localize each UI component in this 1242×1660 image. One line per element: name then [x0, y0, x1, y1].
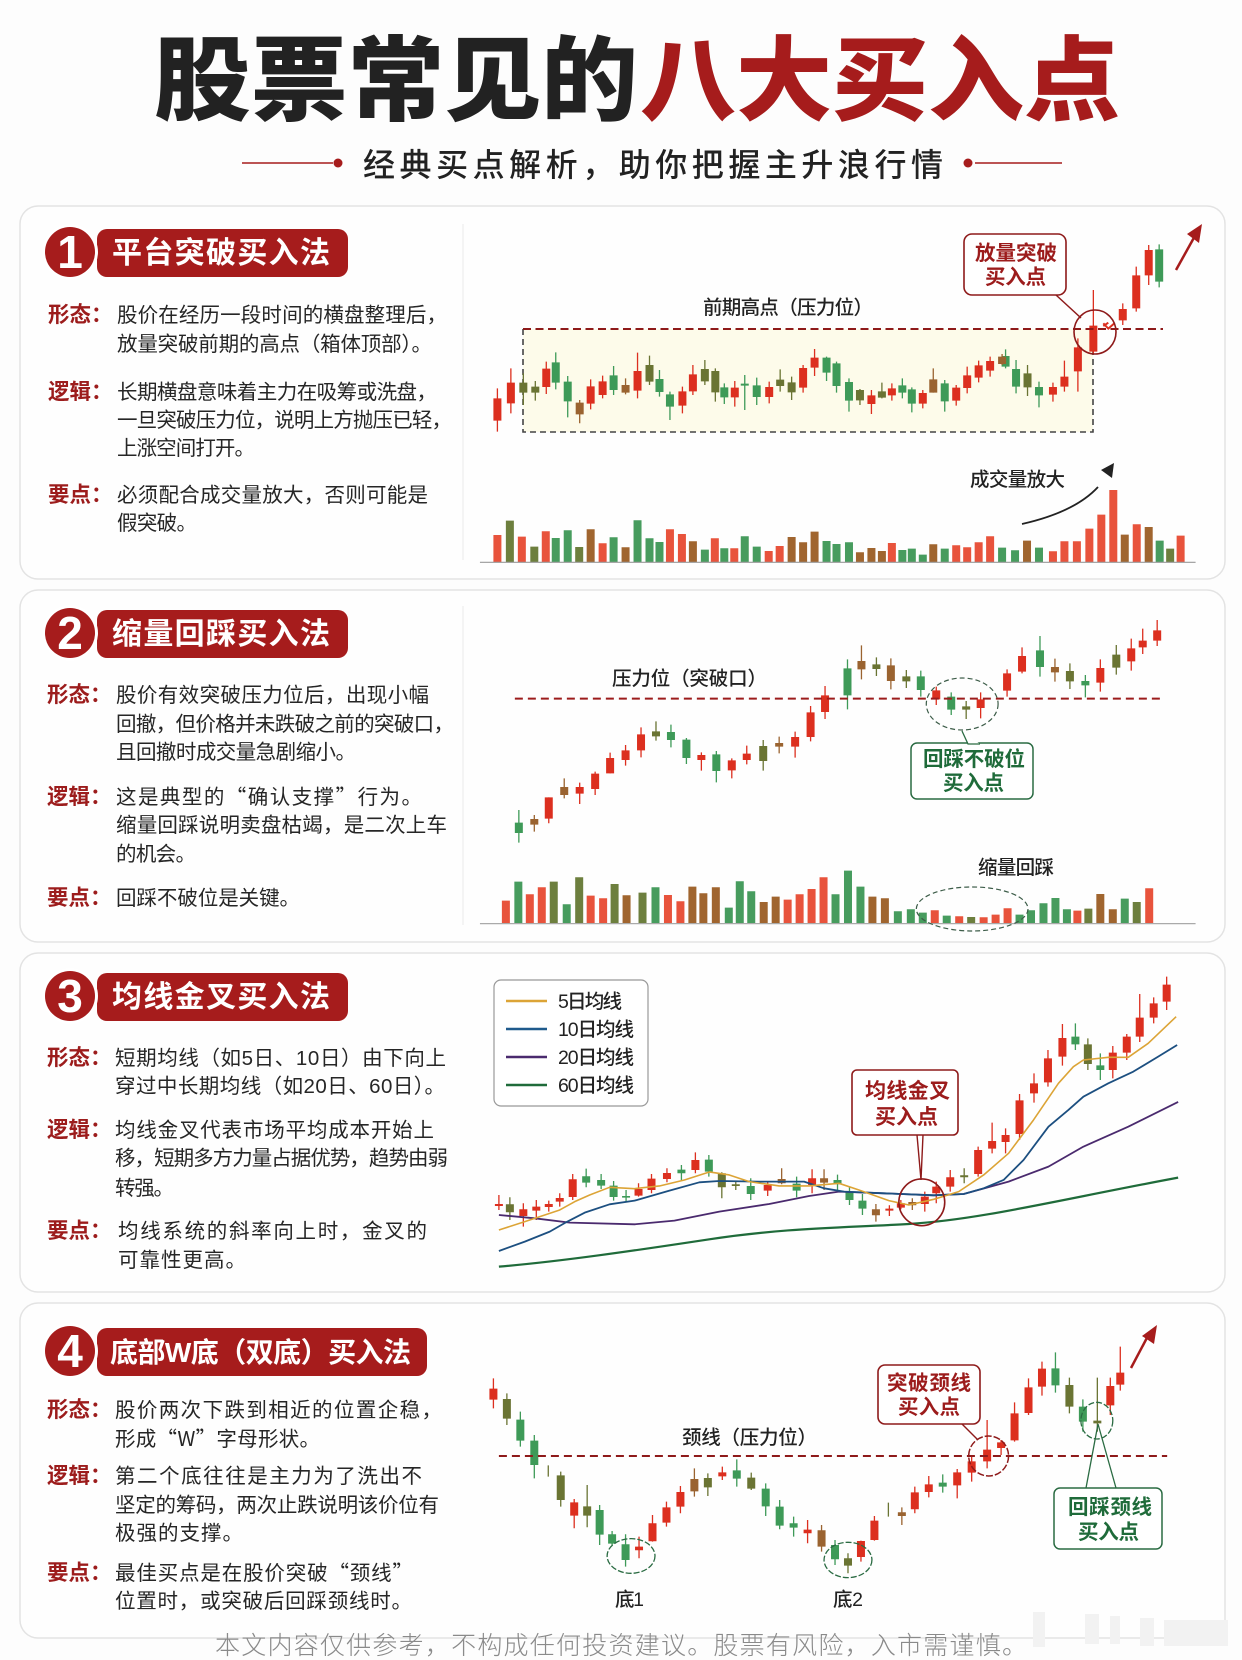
text: method 3 description: 均线金叉代表市场平均成本开始上 — [115, 1119, 434, 1142]
callout: pullback buy point — [911, 731, 1033, 799]
title: 股票常见的 — [154, 31, 638, 133]
text: method 2 description: 缩量回踩说明卖盘枯竭，是二次上车 — [116, 814, 447, 837]
arrow: up trend — [1131, 1325, 1157, 1368]
chart: double bottom candlesticks — [493, 1347, 1167, 1578]
panel: method 2 low-volume pullback — [20, 590, 1225, 942]
text: method 3 description: 转强。 — [115, 1177, 174, 1200]
text: method 2 description: 的机会。 — [116, 843, 196, 866]
legend: moving averages — [494, 980, 648, 1106]
text: method 3 description: 要点： — [47, 1219, 112, 1243]
chart: platform breakout volume — [480, 490, 1196, 562]
text: method 1 description: 逻辑： — [48, 380, 113, 404]
heading: method 2 — [42, 605, 348, 661]
callout: volume breakout buy point — [964, 234, 1081, 318]
heading: method 1 — [42, 224, 348, 280]
label: bottom 2: 底2 — [833, 1589, 863, 1611]
arrow: up trend — [1176, 224, 1202, 270]
heading: method 1: 平台突破买入法 — [112, 236, 330, 270]
callout: volume breakout buy point: 放量突破 — [975, 241, 1057, 265]
text: method 2 description: 且回撤时成交量急剧缩小。 — [116, 741, 356, 764]
text: method 4 description: 形态： — [47, 1397, 112, 1422]
callout: neckline retest buy point: 买入点 — [1078, 1521, 1139, 1544]
text: method 4 description: 形成“W”字母形状。 — [115, 1422, 320, 1452]
text: method 2 description: 形态： — [47, 682, 112, 707]
text: method 2 description: 逻辑： — [47, 785, 112, 809]
text: method 1 description: 一旦突破压力位，说明上方抛压已轻， — [117, 409, 452, 432]
text: method 3 description: 均线系统的斜率向上时，金叉的 — [118, 1220, 427, 1243]
heading: method 4: 底部W底（双底）买入法 — [110, 1337, 411, 1368]
chart: golden cross candlesticks and moving averages — [499, 977, 1178, 1267]
label: resistance: 压力位（突破口） — [612, 668, 767, 690]
label: shrinking volume: 缩量回踩 — [978, 857, 1054, 879]
heading: method 3: 3 — [57, 970, 83, 1022]
callout: neckline retest buy point — [1054, 1424, 1162, 1549]
text: method 1 description: 上涨空间打开。 — [117, 437, 255, 460]
text: method 4 description: 逻辑： — [47, 1464, 112, 1488]
text: method 4 description: 要点： — [47, 1561, 112, 1585]
text: method 4 description: 第二个底往往是主力为了洗出不 — [115, 1465, 422, 1488]
text: method 1 description: 要点： — [48, 483, 113, 507]
callout: neckline breakout buy point: 买入点 — [898, 1396, 960, 1419]
heading: method 4 — [42, 1323, 427, 1379]
panel: method 1 platform breakout — [20, 206, 1225, 579]
callout: pullback buy point: 回踩不破位 — [923, 747, 1025, 771]
arrow: volume curve — [1022, 463, 1114, 524]
heading: method 4: 4 — [57, 1325, 83, 1377]
subtitle: 经典买点解析，助你把握主升浪行情 — [363, 147, 943, 183]
text: method 4 description: 极强的支撑。 — [115, 1522, 243, 1545]
text: method 3 description: 移，短期多方力量占据优势，趋势由弱 — [115, 1147, 448, 1170]
text: method 2 description: 这是典型的“确认支撑”行为。 — [116, 780, 422, 810]
text: method 4 description — [47, 1397, 442, 1613]
text: method 1 description: 必须配合成交量放大，否则可能是 — [117, 484, 428, 507]
panel: method 4 double bottom — [20, 1303, 1225, 1638]
text: method 1 description: 长期横盘意味着主力在吸筹或洗盘， — [117, 381, 437, 404]
heading: method 2: 缩量回踩买入法 — [112, 618, 330, 651]
text: method 3 description: 穿过中长期均线（如20日、60日）。 — [115, 1075, 445, 1098]
text: method 4 description: 坚定的筹码，两次止跌说明该价位有 — [115, 1494, 439, 1517]
heading: method 2: 2 — [57, 607, 83, 659]
text: method 1 description: 放量突破前期的高点（箱体顶部）。 — [117, 333, 432, 356]
legend: moving averages: 10日均线 — [558, 1019, 634, 1041]
text: method 2 description: 股价有效突破压力位后，出现小幅 — [116, 684, 429, 707]
callout: neckline retest buy point: 回踩颈线 — [1068, 1496, 1152, 1519]
footer disclaimer: 本文内容仅供参考，不构成任何投资建议。股票有风险，入市需谨慎。 — [215, 1632, 1027, 1660]
label: volume expansion: 成交量放大 — [970, 469, 1065, 491]
text: method 1 description: 股价在经历一段时间的横盘整理后， — [117, 304, 447, 327]
title: 八大买入点 — [640, 31, 1120, 133]
text: method 3 description: 逻辑： — [47, 1118, 112, 1142]
callout: golden cross buy point: 均线金叉 — [865, 1079, 950, 1103]
text: method 4 description: 位置时，或突破后回踩颈线时。 — [115, 1590, 412, 1613]
heading: method 1: 1 — [57, 226, 83, 278]
text: method 4 description: 最佳买点是在股价突破“颈线” — [115, 1556, 413, 1586]
legend: moving averages: 60日均线 — [558, 1075, 634, 1097]
watermark smudge — [1033, 1612, 1228, 1647]
title — [154, 31, 1120, 133]
text: method 2 description — [47, 682, 454, 910]
text: method 2 description: 回踩不破位是关键。 — [116, 887, 300, 910]
callout: neckline breakout buy point: 突破颈线 — [887, 1371, 971, 1395]
text: method 3 description: 形态： — [47, 1045, 112, 1070]
chart: pullback candlesticks — [515, 620, 1163, 843]
callout: neckline breakout buy point — [878, 1365, 980, 1440]
text: method 3 description: 可靠性更高。 — [118, 1249, 246, 1272]
legend: moving averages: 5日均线 — [558, 991, 622, 1013]
callout: pullback buy point: 买入点 — [943, 772, 1004, 795]
label: previous high: 前期高点（压力位） — [703, 297, 873, 319]
label: neckline: 颈线（压力位） — [682, 1427, 817, 1449]
heading: method 3: 均线金叉买入法 — [112, 981, 330, 1014]
text: method 1 description: 假突破。 — [117, 512, 197, 535]
text: method 2 description: 要点： — [47, 886, 112, 910]
text: method 3 description: 短期均线（如5日、10日）由下向上 — [115, 1047, 446, 1070]
text: method 1 description — [48, 302, 452, 535]
text: method 3 description — [47, 1045, 448, 1272]
callout: golden cross buy point: 买入点 — [875, 1106, 938, 1129]
legend: moving averages: 20日均线 — [558, 1047, 634, 1069]
text: method 1 description: 形态： — [48, 302, 113, 327]
chart: pullback volume — [480, 871, 1196, 931]
chart: platform breakout candlesticks — [497, 244, 1163, 432]
heading: method 3 — [42, 968, 348, 1024]
callout: volume breakout buy point: 买入点 — [985, 266, 1046, 289]
text: method 4 description: 股价两次下跌到相近的位置企稳， — [115, 1399, 442, 1422]
callout: golden cross buy point — [852, 1070, 958, 1180]
panel: method 3 golden cross — [20, 953, 1225, 1292]
label: bottom 1: 底1 — [615, 1589, 644, 1611]
text: method 2 description: 回撤，但价格并未跌破之前的突破口， — [116, 713, 454, 736]
